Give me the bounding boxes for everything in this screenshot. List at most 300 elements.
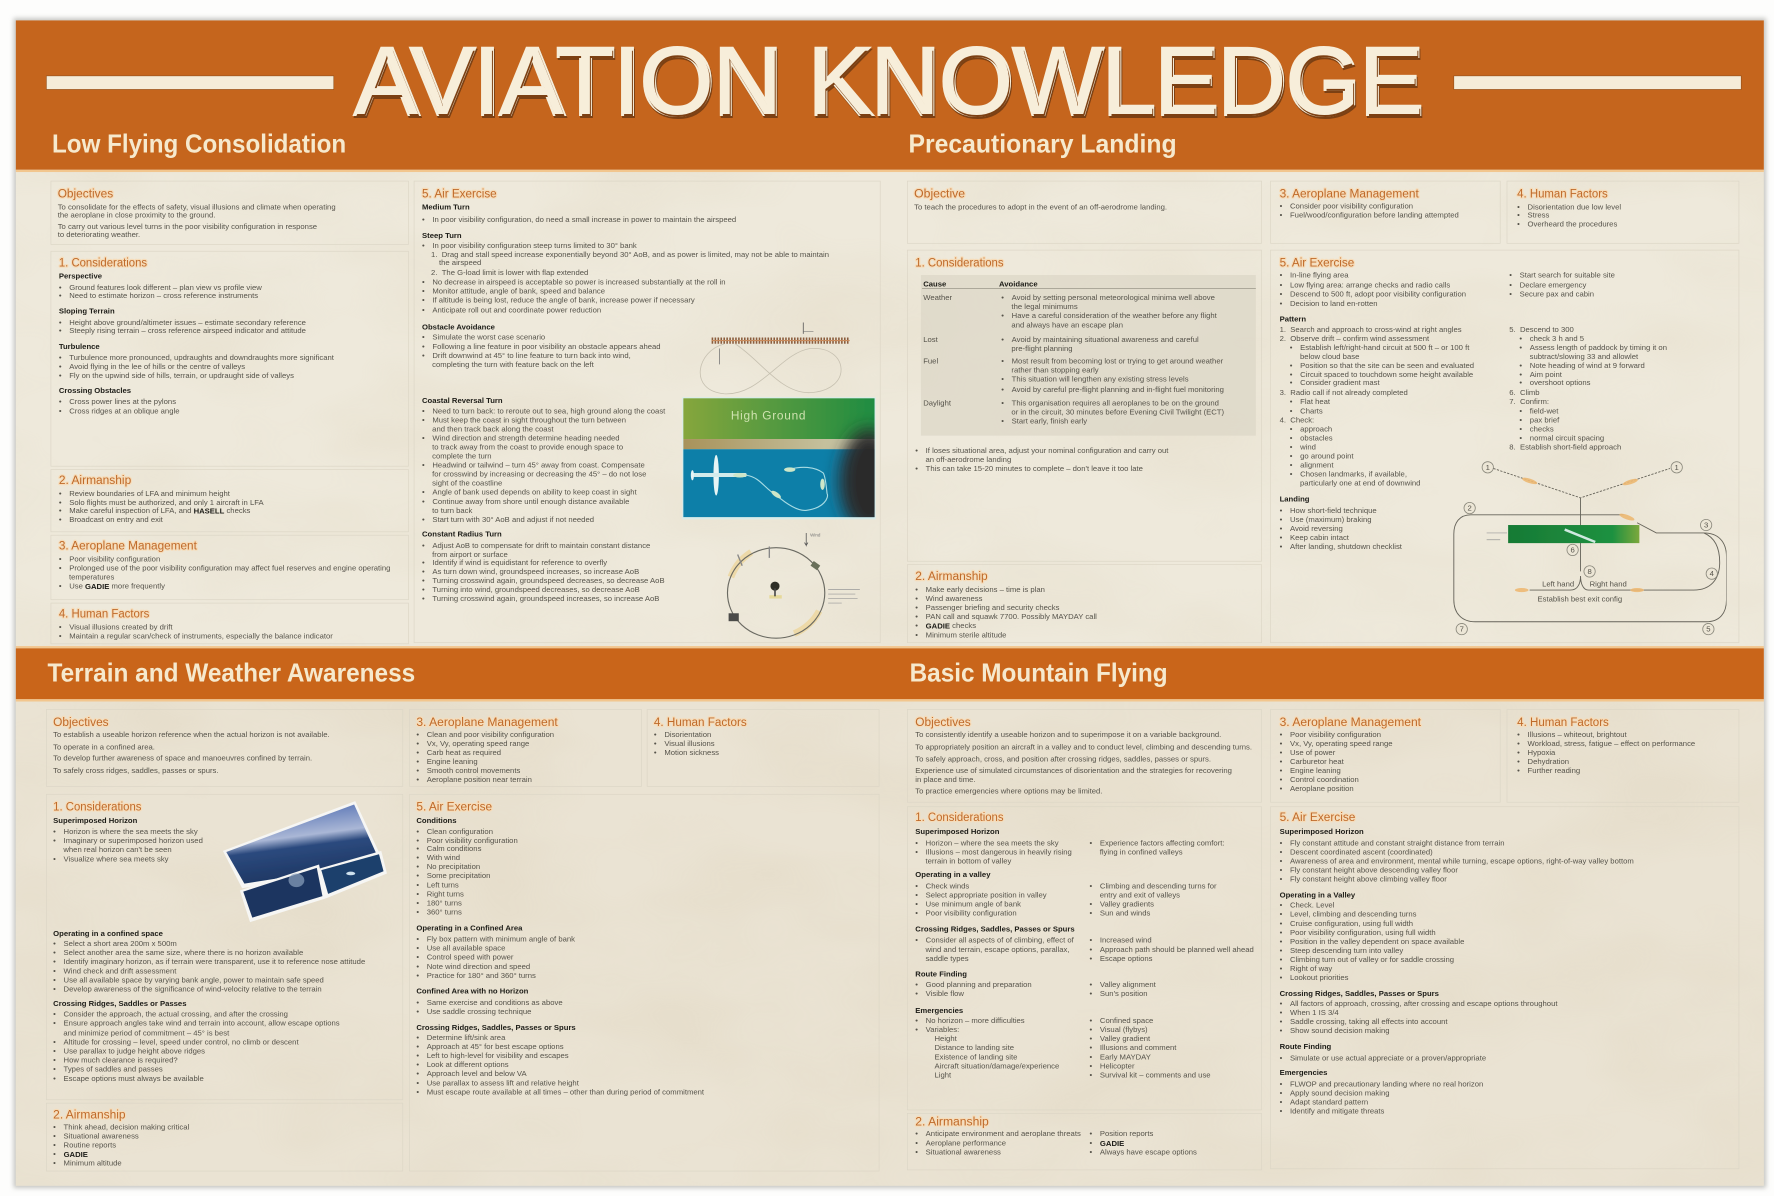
list: coastal reversal turn: complete the turn [432,452,492,461]
list: coastal reversal turn: • Headwind or tailwind – turn 45° away from coast. Compensate [422,461,645,470]
objectives text: To consolidate for the effects of safety, visual illusions and climate when operating [58,203,336,212]
list: crossing ridges: and minimize period of commitment – 45° is best [63,1029,230,1038]
list: aeroplane management [59,554,390,591]
list: considerations left [915,827,1075,1079]
list: aeroplane management [1280,730,1393,793]
list: superimposed horizon [1280,827,1634,884]
heading: human factors: 4. Human Factors [654,715,747,729]
list: air exercise right: • Declare emergency [1509,281,1586,290]
list: steep turn: • In poor visibility configuration steep turns limited to 30° bank [422,241,637,250]
marker numbers: 4 [1710,569,1715,578]
list: pattern left: 3. Radio call if not already completed [1280,388,1408,397]
objective text: To teach the procedures to adopt in the event of an off-aerodrome landing. [914,203,1167,212]
panel: terrain airmanship [53,1107,189,1168]
table: causes and avoidance [921,275,1256,436]
list: perspective: • Need to estimate horizon – cross reference instruments [59,291,258,300]
list: steep turn: Steep Turn [422,231,462,240]
objectives text: To practice emergencies where options may be limited. [915,786,1102,795]
list: considerations right: • Visual (flybys) [1090,1025,1148,1034]
list: considerations right: • Early MAYDAY [1090,1052,1151,1061]
list: considerations right: entry and exit of valleys [1100,890,1180,899]
panel: precautionary considerations [915,256,1256,473]
panel: precautionary air exercise [1280,256,1667,551]
table: causes and avoidance: rather than stopping early [1011,366,1099,375]
list: crossing ridges: • Use parallax to judge height above ridges [53,1047,205,1056]
list: airmanship: • Passenger briefing and security checks [915,603,1060,612]
list: human factors: • Visual illusions [654,739,715,748]
list: aeroplane management: • Clean and poor visibility configuration [416,730,554,739]
list: pattern left: • Charts [1290,406,1323,415]
list: pattern left: 4. Check: [1280,415,1314,424]
list: constant radius turn: • Turning crosswind again, groundspeed decreases, so decrease AoB [422,576,665,585]
list: pattern right: 7. Confirm: [1509,397,1549,406]
right rule [1454,76,1741,89]
list: considerations left: Distance to landing site [935,1043,1014,1052]
list: human factors: • Overheard the procedures [1517,220,1617,229]
list: considerations left: Height [935,1034,958,1043]
list: landing: • Keep cabin intact [1280,533,1350,542]
heading: considerations: 1. Considerations [915,810,1004,824]
list: confined area: • Use all available space [416,944,505,953]
list: crossing ridges [1280,989,1558,1035]
list: constant radius turn: • Identify if wind is equidistant for reference to overfly [422,558,607,567]
list: air exercise left: • Low flying area: arrange checks and radio calls [1280,281,1450,290]
list: coastal reversal turn: for crosswind by increasing or decreasing the 45° – do not lose [432,470,646,479]
list: medium turn: Medium Turn [422,203,470,212]
list: perspective [59,272,262,300]
objectives text: To operate in a confined area. [53,742,155,751]
list: confined space: Operating in a confined space [53,929,164,938]
list: confined space: • Develop awareness of the significance of wind-velocity relative to the terrain [53,984,322,993]
list: confined area [416,923,575,980]
list: pattern left: Pattern [1280,315,1306,324]
list: emergencies: Emergencies [1280,1068,1327,1077]
list: pattern right: • Note heading of wind at 9 forward [1519,361,1645,370]
panel: mountain air exercise [1280,810,1634,1116]
list: steep turn: • Monitor attitude, angle of bank, speed and balance [422,286,605,295]
panel: terrain aeroplane management [416,715,558,784]
diagram: precautionary landing circuit [1454,462,1726,635]
list: coastal reversal turn: • Angle of bank used depends on ability to keep coast in sight [422,488,638,497]
list: steep turn: • Anticipate roll out and coordinate power reduction [422,306,601,315]
list: turbulence [59,342,335,380]
list: aeroplane management: • Carb heat as required [416,748,501,757]
list: considerations right: • Increased wind [1090,936,1152,945]
list: aeroplane management: • Smooth control movements [416,766,520,775]
list: considerations left: Aircraft situation/damage/experience [935,1061,1059,1070]
list: constant radius turn: • Turning crosswind again, groundspeed increases, so increase AoB [422,594,659,603]
list: perspective: Perspective [59,272,103,281]
list: aeroplane management: temperatures [69,573,114,582]
list: human factors: • Stress [1517,211,1549,220]
list: pattern left [1280,315,1474,488]
heading: aeroplane management: 3. Aeroplane Management [1280,187,1419,201]
list: operating in a valley: • Check. Level [1280,901,1335,910]
marker numbers: 6 [1570,545,1575,554]
objectives text: To appropriately position an aircraft in a valley and to conduct level, climbing and descending turns. [915,742,1252,751]
list: considerations right: • Climbing and descending turns for [1090,881,1217,890]
list: crossing ridges: • Saddle crossing, taking all effects into account [1280,1017,1448,1026]
list: pattern left: • Consider gradient mast [1290,378,1380,387]
list: confined space: • Wind check and drift assessment [53,966,177,975]
list: steep turn: the airspeed [439,258,481,267]
list: aeroplane management: • Aeroplane position near terrain [416,775,532,784]
list: coastal reversal turn: • Wind direction and strength determine heading needed [422,433,620,442]
panel: mountain airmanship [915,1114,1197,1156]
panel: precautionary human factors [1517,187,1621,229]
list: human factors: • Maintain a regular scan/check of instruments, especially the balance indicator [59,631,333,640]
heading: airmanship: 2. Airmanship [59,473,132,487]
heading: human factors: 4. Human Factors [1517,187,1608,201]
list: conditions [416,816,518,916]
list: airmanship: • Routine reports [53,1141,116,1150]
list: no horizon: • Use saddle crossing technique [416,1007,531,1016]
list: considerations left: • Select appropriate position in valley [915,890,1047,899]
wind arrow [805,533,808,545]
list: crossing obstacles: • Cross ridges at an oblique angle [59,406,179,415]
list: operating in a valley: • Climbing turn out of valley or for saddle crossing [1280,955,1454,964]
panel: terrain human factors [654,715,747,757]
list: landing: • Avoid reversing [1280,524,1343,533]
list: considerations right: • Escape options [1090,954,1153,963]
list: obstacle avoidance: • Simulate the worst case scenario [422,333,545,342]
list: airmanship right: • Position reports [1090,1129,1153,1138]
list: airmanship [915,585,1097,639]
heading: airmanship: 2. Airmanship [915,1114,989,1128]
list: aeroplane management: • Prolonged use of the poor visibility configuration may affect fuel reserves and engine operating [59,564,390,573]
list: considerations left: wind and terrain, escape options, parallax, [924,945,1069,954]
list: constant radius turn [422,530,665,603]
diagram labels [1538,579,1627,604]
list: airmanship [59,489,265,524]
list: aeroplane management: • Use GADIE more frequently [59,582,165,591]
list: considerations left: Existence of landing site [935,1052,1017,1061]
list: confined space: • Use all available space by varying bank angle, power to maintain safe speed [53,975,324,984]
heading: objectives: Objectives [58,187,113,201]
list: considerations right: flying in confined valleys [1100,847,1183,856]
image: horizon photo collage [223,801,387,922]
list: pattern left: • go around point [1290,452,1354,461]
list: air exercise right [1509,270,1615,299]
list: confined space: • Select another area the same size, where there is no horizon available [53,948,303,957]
panel: terrain objectives [53,715,330,775]
list: conditions: • Calm conditions [416,844,482,853]
list: turbulence: • Fly on the upwind side of hills, terrain, or updraught side of valleys [59,371,294,380]
list: confined area: • Note wind direction and speed [416,962,530,971]
list: emergencies: • Apply sound decision making [1280,1088,1390,1097]
list: considerations left: • Poor visibility configuration [915,909,1017,918]
list: considerations right: • Confined space [1090,1016,1153,1025]
list: pattern left: particularly one at end of downwind [1300,479,1420,488]
list: crossing ridges: • Types of saddles and passes [53,1065,163,1074]
list: aeroplane management: • Engine leaning [1280,766,1341,775]
numbered markers [1456,462,1717,635]
table: causes and avoidance: or in the circuit, 30 minutes before Evening Civil Twilight (ECT) [1011,407,1225,416]
list: coastal reversal turn: to turn back [432,506,473,515]
heading: objective: Objective [914,187,965,201]
list: airmanship: • PAN call and squawk 7700. Possibly MAYDAY call [915,612,1097,621]
list: confined space [53,929,365,993]
objectives text: To safely approach, cross, and position after crossing ridges, saddles, passes or spurs. [915,755,1211,764]
list: aeroplane management: • Poor visibility configuration [1280,730,1381,739]
list: operating in a valley: • Right of way [1280,964,1332,973]
list: superimposed horizon: Superimposed Horizon [53,816,138,825]
panel: precautionary objective [914,187,1167,212]
panel: low flying aeroplane management [59,538,390,591]
list: airmanship: • GADIE [53,1150,88,1159]
list: considerations left: Light [935,1070,952,1079]
list: sloping terrain [59,307,306,335]
heading: aeroplane management: 3. Aeroplane Management [416,715,558,729]
list: coastal reversal turn [422,396,666,524]
objectives text [58,203,336,239]
list: human factors: • Motion sickness [654,748,719,757]
list: obstacle avoidance: Obstacle Avoidance [422,323,496,332]
list: emergencies: • Adapt standard pattern [1280,1098,1368,1107]
list: air exercise left [1280,270,1466,308]
runway [1508,525,1639,543]
diagram: obstacle avoidance figure eight [700,323,850,394]
list: airmanship: • Think ahead, decision making critical [53,1122,189,1131]
list: aeroplane management: • Use of power [1280,748,1336,757]
objectives text: to deteriorating weather. [58,230,140,239]
list: route finding: Route Finding [1280,1042,1332,1051]
list: confined area: • Practice for 180° and 360° turns [416,971,536,980]
list: superimposed horizon: • Fly constant attitude and constant straight distance from terrain [1280,838,1504,847]
list: superimposed horizon: • Awareness of area and environment, mental while turning, escape options, right-of-way valley bottom [1280,857,1634,866]
list: superimposed horizon: when real horizon can't be seen [62,845,172,854]
list: pattern left: below cloud base [1300,352,1359,361]
middle banner [16,646,1764,702]
list: conditions: • Some precipitation [416,871,490,880]
list: pattern left: • Establish left/right-hand circuit at 500 ft – or 100 ft [1290,343,1470,352]
list: emergencies: • Identify and mitigate threats [1280,1107,1385,1116]
panel: precautionary airmanship [915,569,1097,639]
list: sloping terrain: Sloping Terrain [59,307,115,316]
objectives text: To develop further awareness of space and manoeuvres confined by terrain. [53,754,312,763]
list: aeroplane management [416,730,554,784]
list: considerations left: terrain in bottom of valley [925,857,1012,866]
table: causes and avoidance: Daylight [923,398,952,407]
table: causes and avoidance: the legal minimums [1011,302,1078,311]
list: aeroplane management: • Control coordination [1280,775,1359,784]
marker numbers: 5 [1706,625,1711,634]
heading: low flying: Low Flying Consolidation [52,129,346,159]
list: constant radius turn: • Turning into wind, groundspeed decreases, so decrease AoB [422,585,640,594]
panel: mountain considerations [915,810,1254,1079]
list: crossing ridges: • Determine lift/sink area [416,1033,506,1042]
list: coastal reversal turn: • Start turn with 30° AoB and adjust if not needed [422,515,594,524]
list: crossing ridges: • Ensure approach angles take wind and terrain into account, allow escape options [53,1018,340,1027]
notes under table: an off-aerodrome landing [925,455,1011,464]
list: pattern right: 6. Climb [1509,388,1540,397]
table: causes and avoidance: • Avoid by setting personal meteorological minima well above [1001,293,1215,302]
objectives text: Experience use of simulated circumstances of disorientation and the strategies for recovering [915,766,1232,775]
table: causes and avoidance: • Most result from becoming lost or trying to get around weather [1001,356,1224,365]
list: human factors: • Illusions – whiteout, brightout [1517,730,1628,739]
list: airmanship: • Make early decisions – time is plan [915,585,1045,594]
heading: considerations: 1. Considerations [915,256,1004,270]
list: considerations right: • Valley gradient [1090,1034,1151,1043]
list: crossing ridges: • Approach at 45° for best escape options [416,1042,564,1051]
notes under table: • This can take 15-20 minutes to complete – don't leave it too late [915,464,1143,473]
list: crossing ridges: • Use parallax to assess lift and relative height [416,1078,580,1087]
list: aeroplane management: • Carburetor heat [1280,757,1345,766]
table: causes and avoidance: • Have a careful consideration of the weather before any flight [1001,311,1218,320]
list: medium turn [422,203,736,224]
heading: air exercise: 5. Air Exercise [1280,256,1355,270]
list: airmanship: • GADIE checks [915,621,976,630]
left rule [46,76,334,89]
list: steep turn: • No decrease in airspeed is acceptable so power is increased substantially at the roll in [422,277,726,286]
list: landing: • After landing, shutdown checklist [1280,542,1403,551]
list: crossing ridges [416,1023,705,1096]
list: considerations left: • Use minimum angle of bank [915,900,1021,909]
list: human factors [1517,203,1621,229]
list: conditions: • Right turns [416,889,464,898]
list: operating in a valley: • Cruise configuration, using full width [1280,919,1413,928]
list: superimposed horizon: • Visualize where sea meets sky [53,854,169,863]
title: AVIATION KNOWLEDGE [355,29,1423,135]
list: airmanship: • Broadcast on entry and exit [59,515,164,524]
list: no horizon: • Same exercise and conditions as above [416,998,563,1007]
list: pattern right [1509,325,1667,451]
list: human factors [59,622,333,640]
table: causes and avoidance: and always have an escape plan [1011,320,1123,329]
objectives text: To consistently identify a useable horizon and to superimpose it on a variable background. [915,730,1221,739]
list: human factors [1517,730,1695,775]
list: obstacle avoidance [422,323,661,369]
marker numbers: 1 [1675,463,1679,472]
list: considerations right: • Survival kit – comments and use [1090,1070,1211,1079]
table: causes and avoidance: Lost [923,335,939,344]
list: considerations right: • Helicopter [1090,1061,1135,1070]
heading: considerations: 1. Considerations [59,256,147,270]
list: conditions: • Clean configuration [416,827,493,836]
list: operating in a valley: • Level, climbing and descending turns [1280,910,1417,919]
list: confined space: • Identify imaginary horizon, as if terrain were transparent, use it to reference nose attitude [53,957,365,966]
list: operating in a valley: • Lookout priorities [1280,973,1349,982]
list: crossing obstacles: • Cross power lines at the pylons [59,397,176,406]
top banner [16,20,1764,172]
marker numbers: 7 [1460,625,1464,634]
list: obstacle avoidance: • Drift downwind at 45° to line feature to turn back into wind, [422,351,631,360]
list: turbulence: • Turbulence more pronounced, updraughts and downdraughts more significant [59,353,335,362]
aeroplane and turn path [691,455,828,510]
list: coastal reversal turn: and then track back along the coast [432,424,554,433]
list: superimposed horizon: • Fly constant height above climbing valley floor [1280,875,1447,884]
list: superimposed horizon: • Fly constant height above descending valley floor [1280,866,1458,875]
list: coastal reversal turn: • Need to turn back: to reroute out to sea, high ground along the coast [422,406,666,415]
list: considerations left: Crossing Ridges, Saddles, Passes or Spurs [915,924,1075,933]
list: considerations left: Superimposed Horizon [915,827,1000,836]
list: considerations right: • Experience factors affecting comfort: [1090,838,1225,847]
list: landing [1280,495,1403,551]
tree [770,582,780,591]
objectives text [915,730,1252,795]
list: confined space: • Select a short area 200m x 500m [53,939,177,948]
objectives text [53,730,330,775]
list: steep turn: • If altitude is being lost, reduce the angle of bank, increase power if necessary [422,295,695,304]
panel: low flying human factors [59,606,333,640]
list: aeroplane management: • Vx, Vy, operating speed range [1280,739,1393,748]
panel: low flying airmanship [59,473,265,524]
list: crossing ridges: • Must escape route available at all times – other than during period of commitment [416,1087,705,1096]
list: pattern left: • approach [1290,424,1332,433]
list: crossing ridges [53,999,340,1083]
list: crossing ridges: • Approach level and below VA [416,1069,527,1078]
heading: air exercise: 5. Air Exercise [1280,810,1356,824]
list: pattern left: 1. Search and approach to cross-wind at right angles [1280,325,1462,334]
list: pattern left: • obstacles [1290,433,1333,442]
heading: airmanship: 2. Airmanship [53,1107,126,1121]
list: medium turn: • In poor visibility configuration, do need a small increase in power to maintain the airspeed [422,215,736,224]
list: airmanship: • Review boundaries of LFA and minimum height [59,489,231,498]
diagram labels: Right hand [1590,579,1627,588]
list: landing: Landing [1280,495,1310,504]
list: steep turn: 2. The G-load limit is lower with flap extended [431,268,588,277]
list: pattern right: subtract/slowing 33 and allowlet [1530,352,1639,361]
list: air exercise right: • Start search for suitable site [1509,270,1615,279]
list: pattern right: • check 3 h and 5 [1519,334,1584,343]
heading: airmanship: 2. Airmanship [915,569,988,583]
list: airmanship left [915,1129,1081,1156]
heading: human factors: 4. Human Factors [59,606,149,620]
diagram: constant radius turn [727,533,860,638]
list: turbulence: Turbulence [59,342,100,351]
list: perspective: • Ground features look different – plan view vs profile view [59,283,262,292]
list: pattern left: • Chosen landmarks, if available, [1290,470,1407,479]
list: considerations left: • Consider all aspects of of climbing, effect of [915,936,1075,945]
list: conditions: • With wind [416,853,460,862]
list: airmanship right [1090,1129,1197,1156]
list: human factors: • Disorientation due low level [1517,203,1621,212]
heading: terrain: Terrain and Weather Awareness [48,658,415,688]
list: crossing ridges: Crossing Ridges, Saddles, Passes or Spurs [416,1023,576,1032]
list: considerations left: • Check winds [915,881,969,890]
notes under table [915,446,1169,473]
list: airmanship right: • GADIE [1090,1138,1124,1147]
table: causes and avoidance: Cause [923,280,947,289]
list: aeroplane management: • Poor visibility configuration [59,554,160,563]
table: causes and avoidance: • Avoid by careful pre-flight planning and in-flight fuel monitoring [1001,385,1224,394]
list: considerations left: • Good planning and preparation [915,980,1032,989]
panel: low flying objectives [58,187,336,239]
list: pattern right: 5. Descend to 300 [1509,325,1574,334]
heading: aeroplane management: 3. Aeroplane Management [59,538,198,552]
list: airmanship: • Wind awareness [915,594,983,603]
panel: precautionary aeroplane management [1280,187,1459,220]
list: pattern left: • alignment [1290,461,1334,470]
list: airmanship [53,1122,189,1168]
panel: terrain considerations [53,800,365,1083]
list: superimposed horizon [53,816,203,863]
list: crossing obstacles: Crossing Obstacles [59,386,131,395]
list: crossing ridges: • How much clearance is required? [53,1056,178,1065]
marker numbers: 1 [1486,463,1490,472]
image: high ground coastal turn [682,397,876,520]
objectives text: the aeroplane in close proximity to the ground. [58,211,215,220]
list: considerations left: Operating in a valley [915,870,991,879]
list: human factors: • Dehydration [1517,757,1569,766]
list: crossing ridges: Crossing Ridges, Saddles, Passes or Spurs [1280,989,1439,998]
objectives text: To carry out various level turns in the poor visibility configuration in response [58,222,317,231]
list: crossing ridges: Crossing Ridges, Saddles or Passes [53,999,186,1008]
list: considerations left: • Visible flow [915,989,964,998]
list: obstacle avoidance: • Following a line feature in poor visibility an obstacle appears ahead [422,342,661,351]
list: airmanship left: • Aeroplane performance [915,1138,1006,1147]
marker numbers: 8 [1587,567,1592,576]
